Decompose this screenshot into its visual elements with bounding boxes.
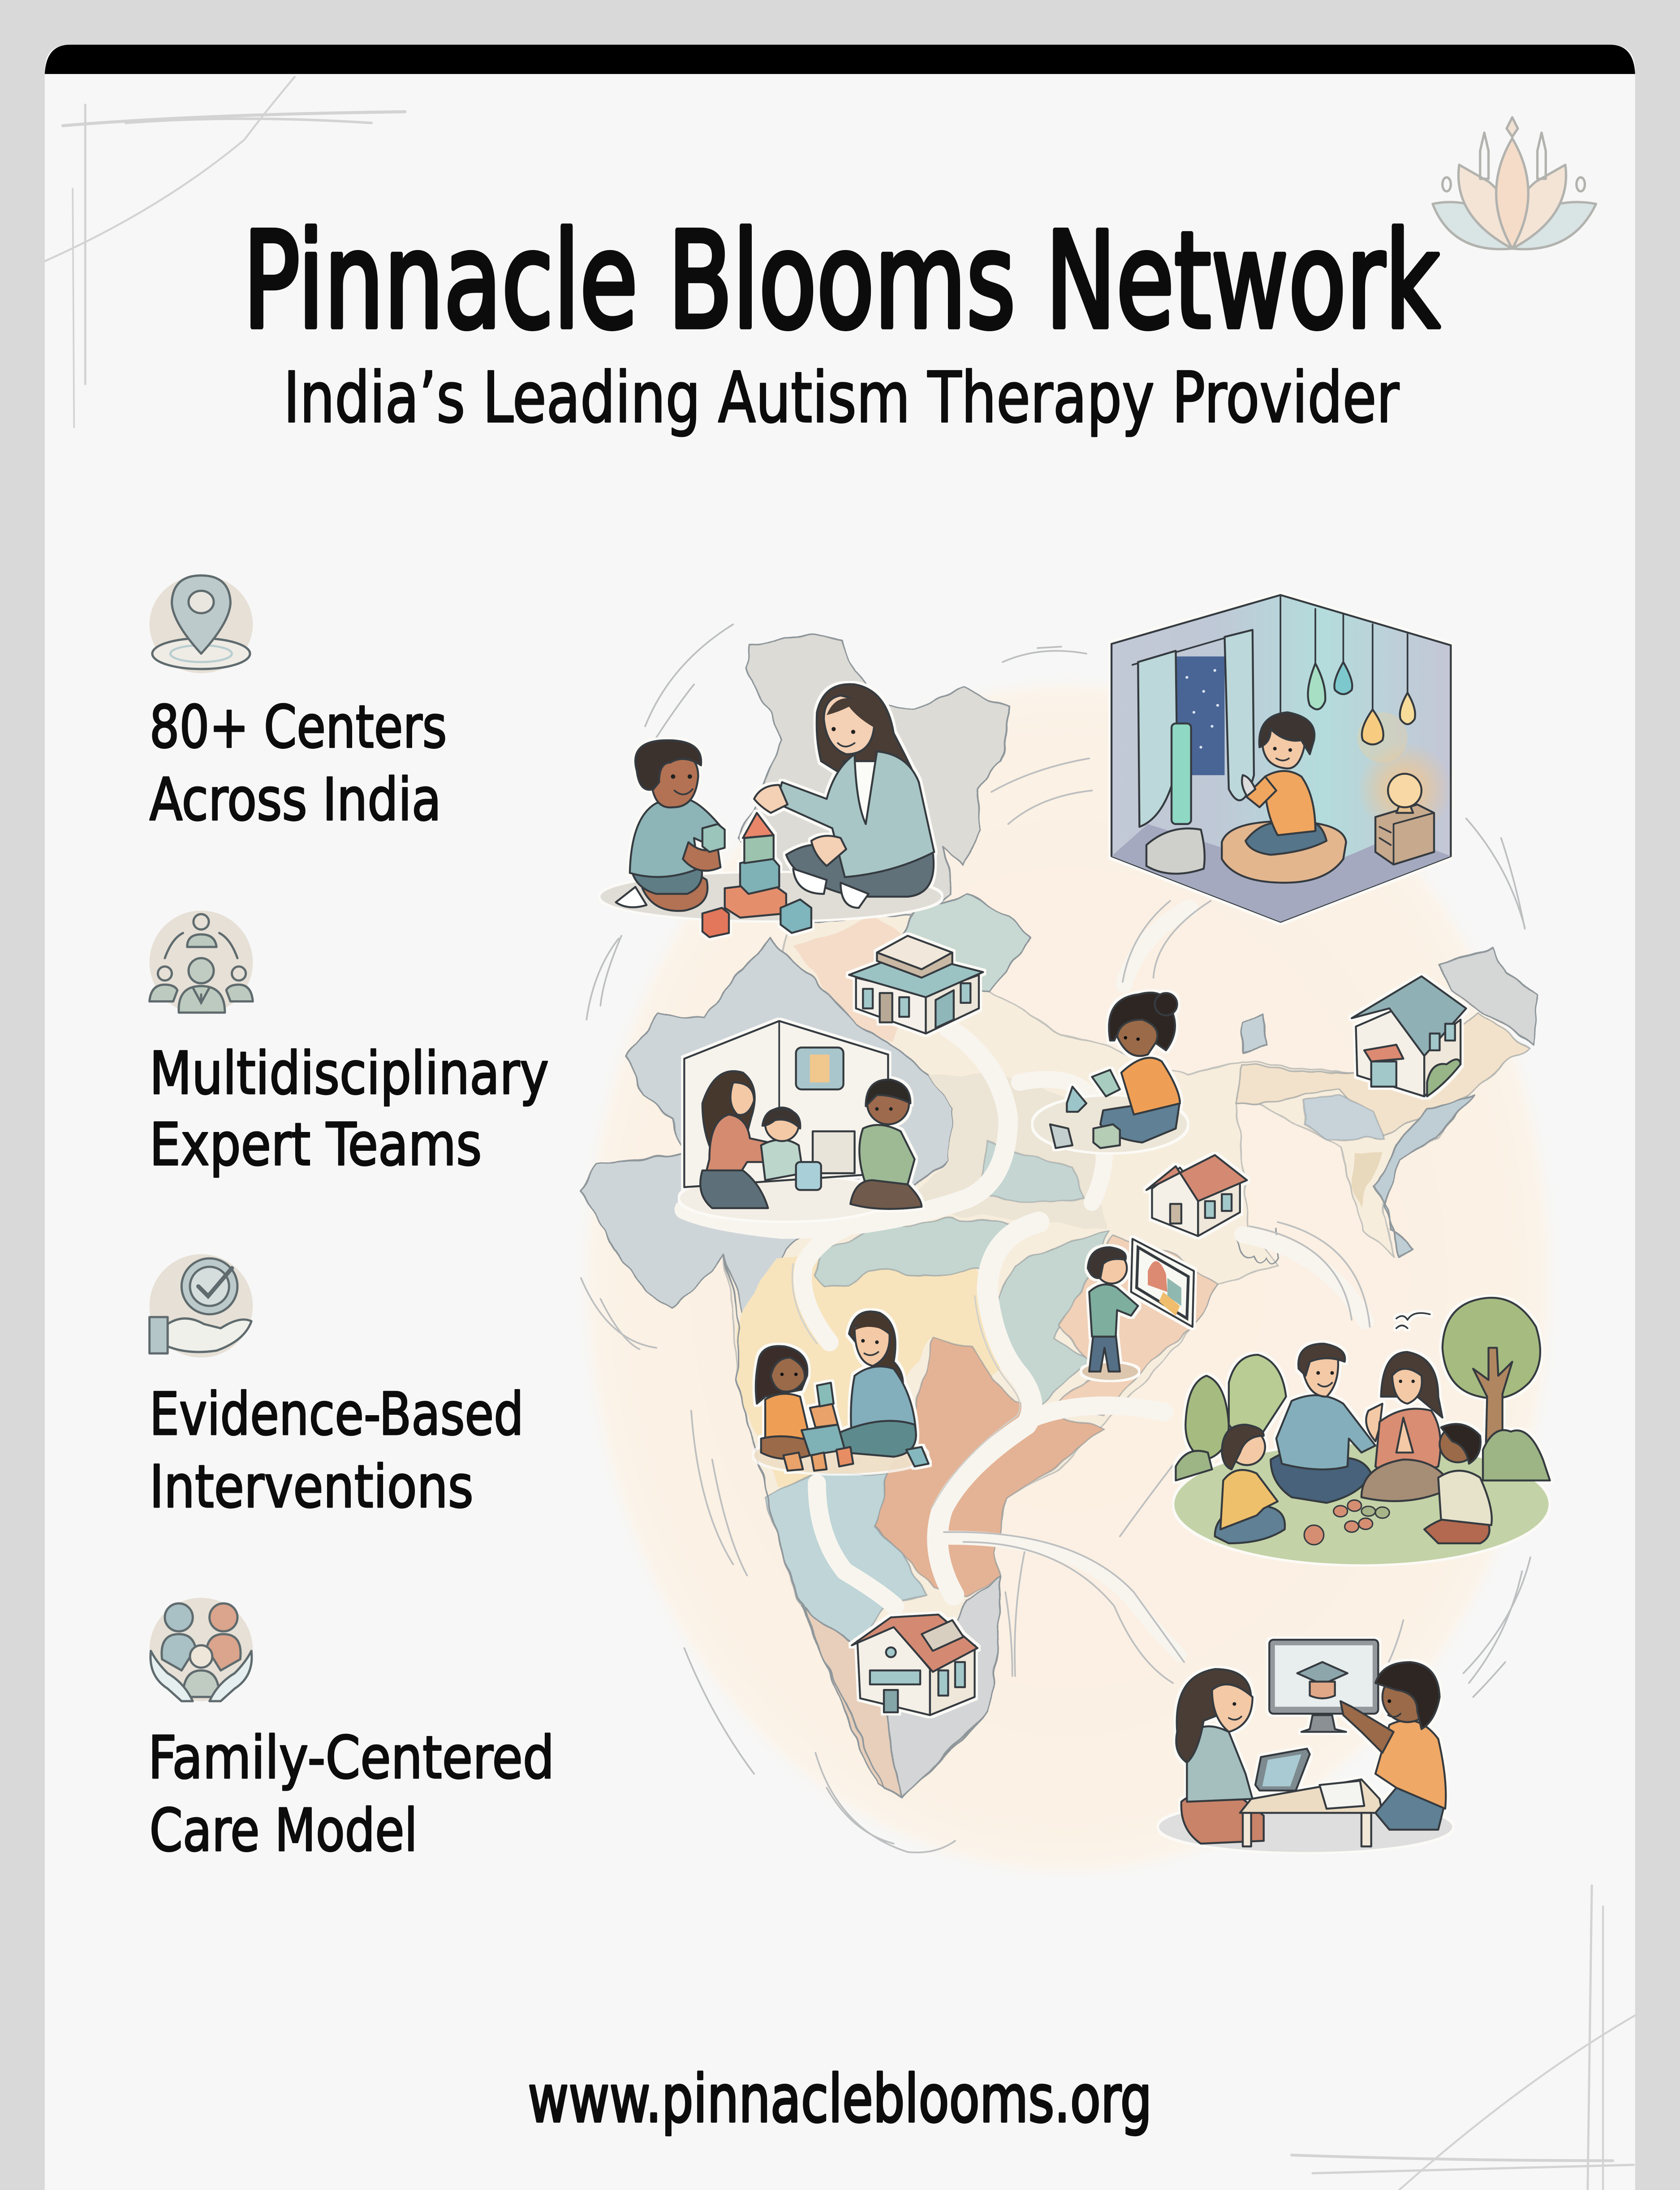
icon: team [150, 911, 253, 1014]
trees [1176, 1298, 1550, 1481]
illustration: girl and woman with blocks [754, 1312, 929, 1473]
desk [1240, 1780, 1383, 1846]
curtains and rod [1133, 630, 1254, 827]
map routes [684, 901, 1370, 1683]
building: flat roof center [849, 936, 983, 1033]
map: northeast blue blobs [1243, 1014, 1473, 1257]
building: northeast house [1352, 976, 1466, 1097]
boy on cushion [1242, 713, 1327, 855]
map: northeast band [1236, 1013, 1529, 1138]
therapist [700, 1071, 782, 1208]
label: family-centered care model: Family-Centered [148, 1723, 554, 1792]
icon: lotus logo [1433, 117, 1596, 249]
icon: family in hands [150, 1598, 253, 1701]
computer monitor [1269, 1640, 1378, 1732]
feature: 80+ centers [150, 575, 447, 834]
label: evidence-based interventions: Evidence-Based [150, 1380, 524, 1448]
label line 2: Interventions [150, 1452, 474, 1521]
map: southern regions [735, 1218, 1218, 1797]
room floor [1111, 824, 1451, 922]
illustration: family in the park [1174, 1298, 1550, 1564]
sketch lines: bottom right corner [1292, 1886, 1635, 2190]
mother [754, 684, 934, 908]
sketch lines: top left corner [45, 77, 405, 428]
map: north region [740, 634, 1008, 922]
stacked blocks [784, 1383, 929, 1471]
illustration: online therapy session [1159, 1640, 1452, 1852]
boy at desk [1340, 1662, 1446, 1830]
room corner [684, 1021, 888, 1187]
illustration: girl with curly hair and toys [1034, 993, 1187, 1152]
map: central cream region [894, 1076, 1103, 1229]
girl with tablet [1176, 1669, 1310, 1844]
subtitle: India’s Leading Autism Therapy Provider [284, 357, 1400, 438]
therapist two [850, 1080, 922, 1209]
illustration: boy painting [1082, 1239, 1194, 1380]
cushion [1222, 821, 1346, 883]
child [761, 1108, 821, 1190]
stones [1304, 1500, 1389, 1545]
bubble tube [1146, 723, 1205, 874]
map: west region [580, 937, 954, 1320]
woman [832, 1312, 916, 1457]
label line 2: Across India [150, 765, 441, 834]
map of India [580, 634, 1539, 1797]
map: central sage region [980, 1142, 1085, 1201]
label line 2: Care Model [150, 1796, 418, 1865]
map: upper central sage region [894, 895, 1029, 992]
illustration: sensory room [1111, 595, 1452, 922]
woman [1361, 1352, 1452, 1501]
label: 80+ centers across India: 80+ Centers [150, 692, 447, 761]
map: upper central peach region [793, 918, 915, 1041]
icon: check in hand [150, 1254, 253, 1357]
building: south house [852, 1615, 978, 1715]
swoosh lines around the map [581, 624, 1530, 1853]
building: red roof house [1146, 1155, 1247, 1236]
background glow circle [586, 684, 1550, 1871]
room walls [1111, 595, 1451, 922]
website url: www.pinnacleblooms.org [528, 2060, 1152, 2137]
man [1271, 1343, 1383, 1503]
top black bar [45, 45, 1635, 74]
feature: multidisciplinary teams [150, 911, 549, 1179]
side table and lamp [1357, 742, 1452, 864]
illustration: therapy room [680, 1021, 922, 1221]
pendant lights [1308, 609, 1415, 763]
grass ground [1174, 1444, 1549, 1564]
toy blocks tower [702, 813, 811, 937]
label: multidisciplinary expert teams: Multidisciplinary [150, 1039, 549, 1107]
map: coast outline south-west [725, 1253, 987, 1797]
map: base body [725, 908, 1466, 1797]
map: northeast region [1439, 950, 1539, 1045]
boy right [1424, 1424, 1492, 1543]
feature: family-centered care [148, 1598, 554, 1865]
ground shadow [600, 873, 941, 920]
label line 2: Expert Teams [150, 1110, 482, 1179]
window [1174, 657, 1224, 775]
map: bay delta detail [1236, 1229, 1278, 1264]
birds [1396, 1313, 1430, 1328]
boy [616, 740, 725, 911]
boy left [1215, 1425, 1285, 1543]
illustration: mother and boy with blocks [600, 684, 941, 937]
icon: location pin [150, 575, 253, 673]
feature: evidence-based interventions [150, 1254, 524, 1521]
girl [756, 1346, 824, 1459]
